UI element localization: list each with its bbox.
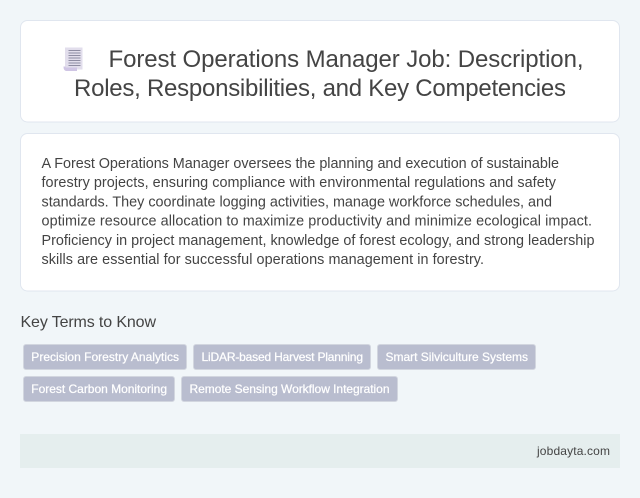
panel: description card: [20, 134, 620, 291]
text block: description: standards. They coordinate logging activities, manage workforce schedules, and: [42, 194, 552, 210]
tag: LiDAR-based Harvest Planning: LiDAR-based Harvest Planning: [202, 350, 363, 364]
footer bar: [20, 434, 620, 468]
heading: key terms: Key Terms to Know: [20, 314, 156, 331]
text block: description: A Forest Operations Manager oversees the planning and execution of sustainable: [42, 156, 559, 172]
tag: Precision Forestry Analytics: Precision Forestry Analytics: [31, 350, 179, 364]
tag: Precision Forestry Analytics: [24, 344, 186, 370]
text block: description: forestry projects, ensuring compliance with environmental regulations and safety: [42, 175, 557, 191]
title: Forest Operations Manager Job: Description,: [108, 46, 584, 73]
tag: Forest Carbon Monitoring: Forest Carbon Monitoring: [31, 382, 167, 396]
tag: Remote Sensing Workflow Integration: [182, 376, 398, 402]
text block: description: [42, 156, 594, 268]
tag: Smart Silviculture Systems: [378, 344, 536, 370]
text block: description: skills are essential for successful operations management in forestry.: [42, 252, 484, 268]
tag: Forest Carbon Monitoring: [24, 376, 174, 402]
tag: Remote Sensing Workflow Integration: Remote Sensing Workflow Integration: [190, 382, 390, 396]
text block: description: optimize resource allocation to maximize productivity and minimize ecological impact.: [42, 214, 592, 230]
footer bar: jobdayta.com: [536, 444, 610, 458]
tag: Smart Silviculture Systems: Smart Silviculture Systems: [386, 350, 528, 364]
text block: description: Proficiency in project management, knowledge of forest ecology, and strong leadership: [42, 233, 594, 249]
icon: paper scroll: [64, 48, 82, 71]
title: Roles, Responsibilities, and Key Competencies: [74, 75, 566, 102]
panel: title card: [20, 20, 620, 122]
tag: LiDAR-based Harvest Planning: [194, 344, 370, 370]
title: [74, 46, 584, 102]
